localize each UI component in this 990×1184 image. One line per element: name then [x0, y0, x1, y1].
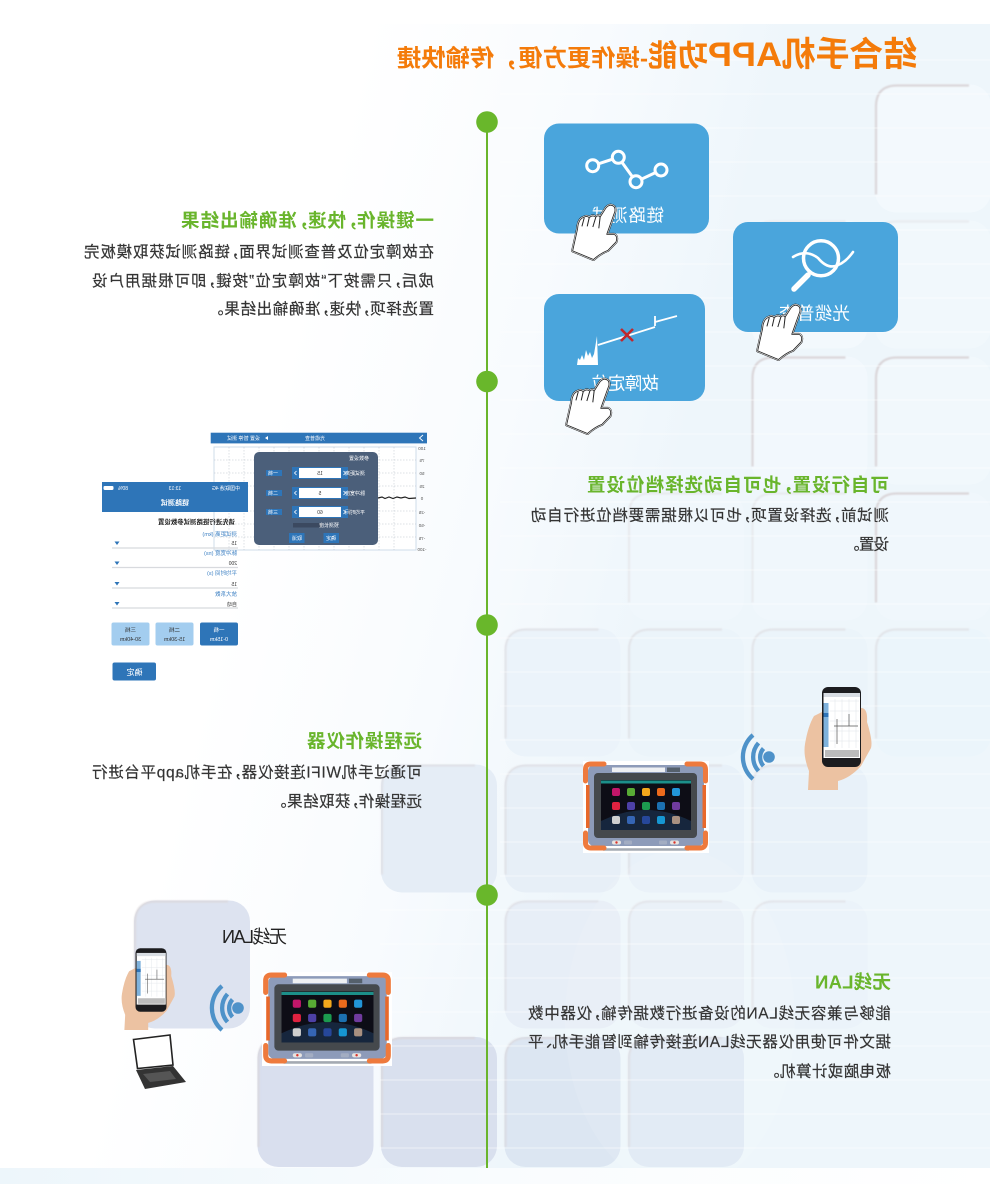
range buttons: 15-30km — [163, 637, 185, 643]
text block: one-key operation: 成后，只需按下“故障定位”按键，即可根据用户设 — [92, 272, 434, 290]
confirm button: 确定 — [126, 667, 142, 677]
settings dialog: 二档 — [268, 490, 278, 497]
screenshot: phone link test: 80% — [117, 486, 128, 492]
remote illustration: tablet LAN — [262, 972, 392, 1066]
illustration: phone in hand remote — [804, 687, 872, 790]
illustration: phone in hand LAN — [122, 948, 175, 1030]
settings dialog: 5 — [318, 491, 321, 497]
screenshot: phone link test: 13:13 — [169, 486, 181, 492]
screenshot: phone link test: 测试距离 (km) — [202, 530, 237, 538]
text block: wireless LAN: 无线LAN — [815, 972, 891, 992]
text block: remote operation — [92, 730, 422, 810]
settings dialog: 参数设置 — [349, 455, 369, 462]
screenshot: cable survey settings: -50 — [418, 523, 425, 528]
settings dialog: 预测长度 — [319, 522, 339, 529]
range buttons: 三档 — [125, 626, 136, 634]
text block: remote operation: 远程操作仪器 — [307, 730, 422, 752]
icon: magnifier — [793, 241, 853, 289]
text block: settings: 测试前，选择设置项，也可以根据需要档位进行自动 — [531, 506, 889, 524]
screenshot: cable survey settings: 75 — [419, 458, 425, 463]
screenshot: phone link test: 链路测试 — [161, 498, 189, 507]
settings dialog: 三档 — [268, 509, 278, 516]
screenshot: phone link test — [102, 482, 248, 680]
screenshot: cable survey settings: 25 — [419, 484, 425, 489]
text block: wireless LAN: 板电脑或计算机。 — [772, 1062, 891, 1080]
screenshot: cable survey settings: 设置 暂停 测试 — [227, 435, 260, 442]
text block: wireless LAN: 能够与兼容无线LAN的设备进行数据传输，仪器中数 — [528, 1004, 891, 1022]
icon: wifi signal LAN — [212, 986, 244, 1030]
label: fault location: 故障定位 — [591, 374, 659, 394]
card: link test — [544, 124, 709, 234]
text block: one-key operation: 一键操作，快速，准确输出结果 — [181, 210, 434, 231]
timeline — [476, 111, 498, 1168]
text block: one-key operation — [84, 210, 434, 318]
label: link test: 链路测试 — [592, 206, 664, 226]
settings dialog: 脉冲宽度 — [345, 490, 365, 497]
text block: wireless LAN — [528, 972, 891, 1080]
text block: remote operation: 可通过手机WIFI连接仪器，在手机app平台进行 — [92, 764, 422, 782]
settings dialog — [254, 452, 378, 545]
title: -操作更方便，传输快捷 — [397, 44, 648, 71]
icon: wifi signal remote — [743, 735, 775, 779]
screenshot: phone link test: 中国联通 4G — [212, 485, 240, 492]
screenshot: phone link test: 200 — [228, 561, 237, 567]
text block: settings: 设置。 — [852, 536, 889, 554]
title: 功能 — [648, 40, 708, 73]
screenshot: cable survey settings: -75 — [418, 536, 425, 541]
text block: wireless LAN: 据文件可使用仪器无线LAN连接传输到智能手机、平 — [528, 1033, 891, 1051]
screenshot: cable survey settings: 50 — [419, 471, 425, 476]
text block: remote operation: 远程操作，获取结果。 — [279, 792, 422, 810]
settings dialog: 确定 — [326, 535, 336, 542]
text block: settings — [531, 474, 889, 554]
settings dialog: 15 — [317, 471, 323, 477]
range buttons: 一档 — [213, 626, 225, 634]
settings dialog: 取消 — [292, 535, 302, 542]
text block: one-key operation: 置选择项，快速，准确输出结果。 — [216, 300, 434, 318]
icon: link nodes — [587, 151, 667, 188]
icon: pointing hand 3 — [567, 379, 611, 433]
illustration: laptop — [134, 1035, 186, 1089]
icon: pointing hand 2 — [758, 305, 802, 359]
confirm button — [112, 662, 156, 680]
screenshot: phone link test: 15 — [231, 541, 237, 547]
card: fault location — [544, 294, 705, 401]
title: APP — [708, 36, 782, 74]
range buttons: 二档 — [169, 626, 180, 634]
screenshot: cable survey settings: -25 — [418, 510, 425, 515]
remote illustration: tablet — [583, 761, 709, 853]
range buttons: 30-40km — [119, 637, 141, 643]
text block: settings: 可自行设置，也可自动选择档位设置 — [587, 474, 889, 496]
screenshot: phone link test: 脉冲宽度 (ns) — [204, 549, 237, 557]
screenshot: phone link test: 15 — [231, 582, 237, 588]
icon: fault trace — [577, 316, 677, 365]
screenshot: cable survey settings: 光缆普查 — [305, 435, 325, 442]
screenshot: phone link test: 平均时间 (s) — [207, 569, 237, 577]
label: wireless LAN diagram: 无线LAN — [222, 927, 287, 947]
label: cable survey: 光缆普查 — [779, 304, 850, 324]
title — [397, 36, 917, 74]
screenshot: phone link test: 自动 — [227, 601, 237, 608]
card: cable survey — [733, 222, 898, 332]
screenshot: cable survey settings: -100 — [417, 547, 427, 552]
range buttons: 0-15km — [209, 637, 228, 643]
screenshot: cable survey settings: 100 — [418, 446, 426, 451]
text block: one-key operation: 在故障定位及普查测试界面，链路测试获取模板完 — [84, 243, 434, 261]
screenshot: phone link test: 请先进行链路测试参数设置 — [157, 517, 235, 526]
screenshot: cable survey settings: 0 — [420, 496, 423, 501]
screenshot: phone link test: 放大系数 — [214, 590, 237, 598]
settings dialog: 测试距离 — [345, 470, 365, 477]
range buttons — [112, 622, 238, 646]
settings dialog: 一档 — [268, 470, 278, 477]
icon: pointing hand 1 — [573, 205, 617, 259]
screenshot: cable survey settings — [211, 433, 427, 552]
settings dialog: 平均时间 — [345, 509, 365, 516]
settings dialog: 60 — [317, 510, 323, 516]
title: 结合手机 — [782, 36, 917, 74]
